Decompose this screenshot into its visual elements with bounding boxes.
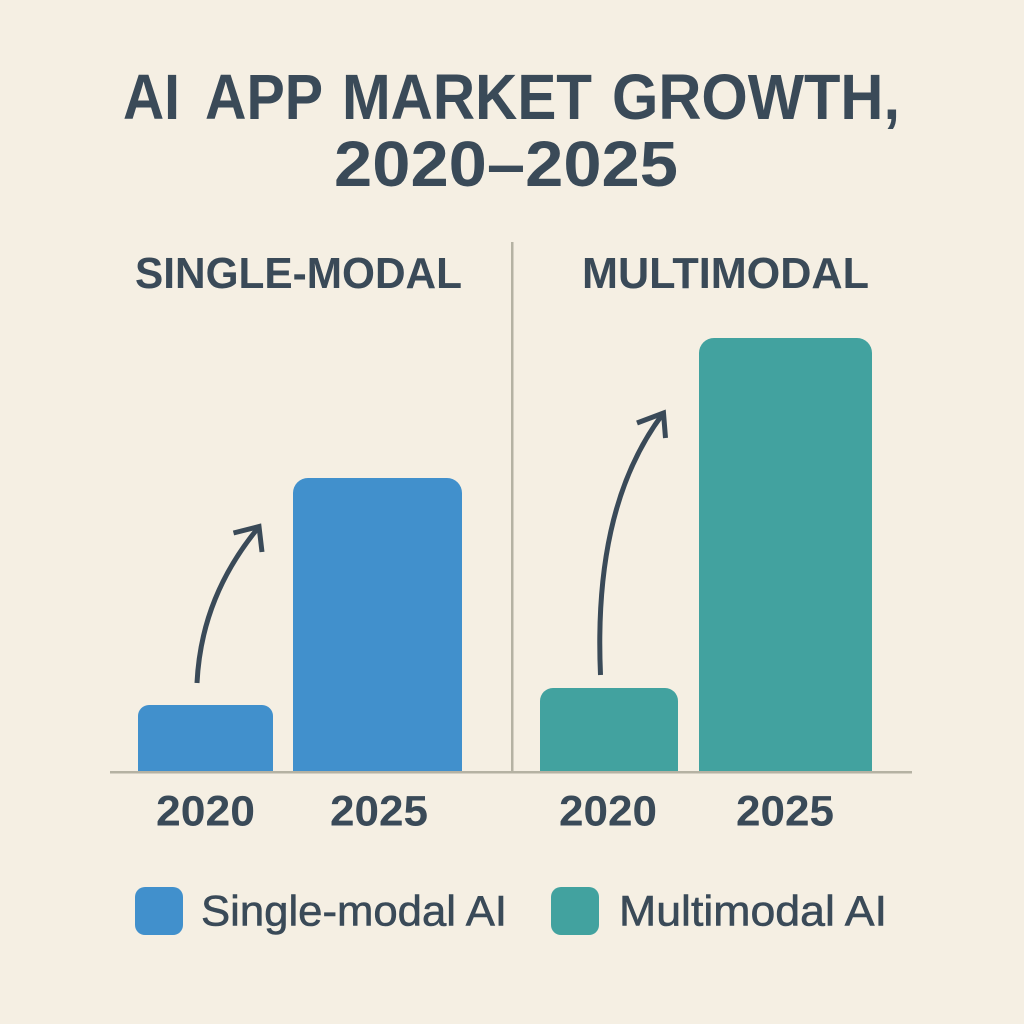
bar: multimodal 2025 (699, 338, 872, 772)
axis baseline (110, 771, 912, 774)
arrow: single-modal growth (197, 526, 262, 683)
axis labels (156, 788, 834, 836)
panel divider (511, 242, 514, 772)
axis labels: 2025 (330, 788, 428, 836)
axis labels: 2020 (559, 788, 657, 836)
bar: single-modal 2025 (293, 478, 462, 772)
legend swatch: single-modal (135, 887, 183, 935)
axis labels: 2020 (156, 788, 255, 836)
title: GROWTH, (612, 61, 900, 133)
title: AI (123, 61, 180, 133)
bar: multimodal 2020 (540, 688, 678, 772)
legend (135, 887, 887, 936)
legend label: single-modal: Single-modal AI (201, 888, 507, 936)
title (123, 61, 900, 200)
arrow: multimodal growth (600, 413, 666, 675)
legend label: multimodal: Multimodal AI (619, 888, 887, 936)
title: MARKET (342, 61, 592, 133)
heading: single-modal: SINGLE-MODAL (135, 249, 462, 298)
bar: single-modal 2020 (138, 705, 273, 772)
heading: multimodal: MULTIMODAL (582, 249, 869, 298)
title: APP (205, 61, 322, 133)
title: 2020–2025 (334, 128, 678, 200)
legend swatch: multimodal (551, 887, 599, 935)
axis labels: 2025 (736, 788, 834, 836)
